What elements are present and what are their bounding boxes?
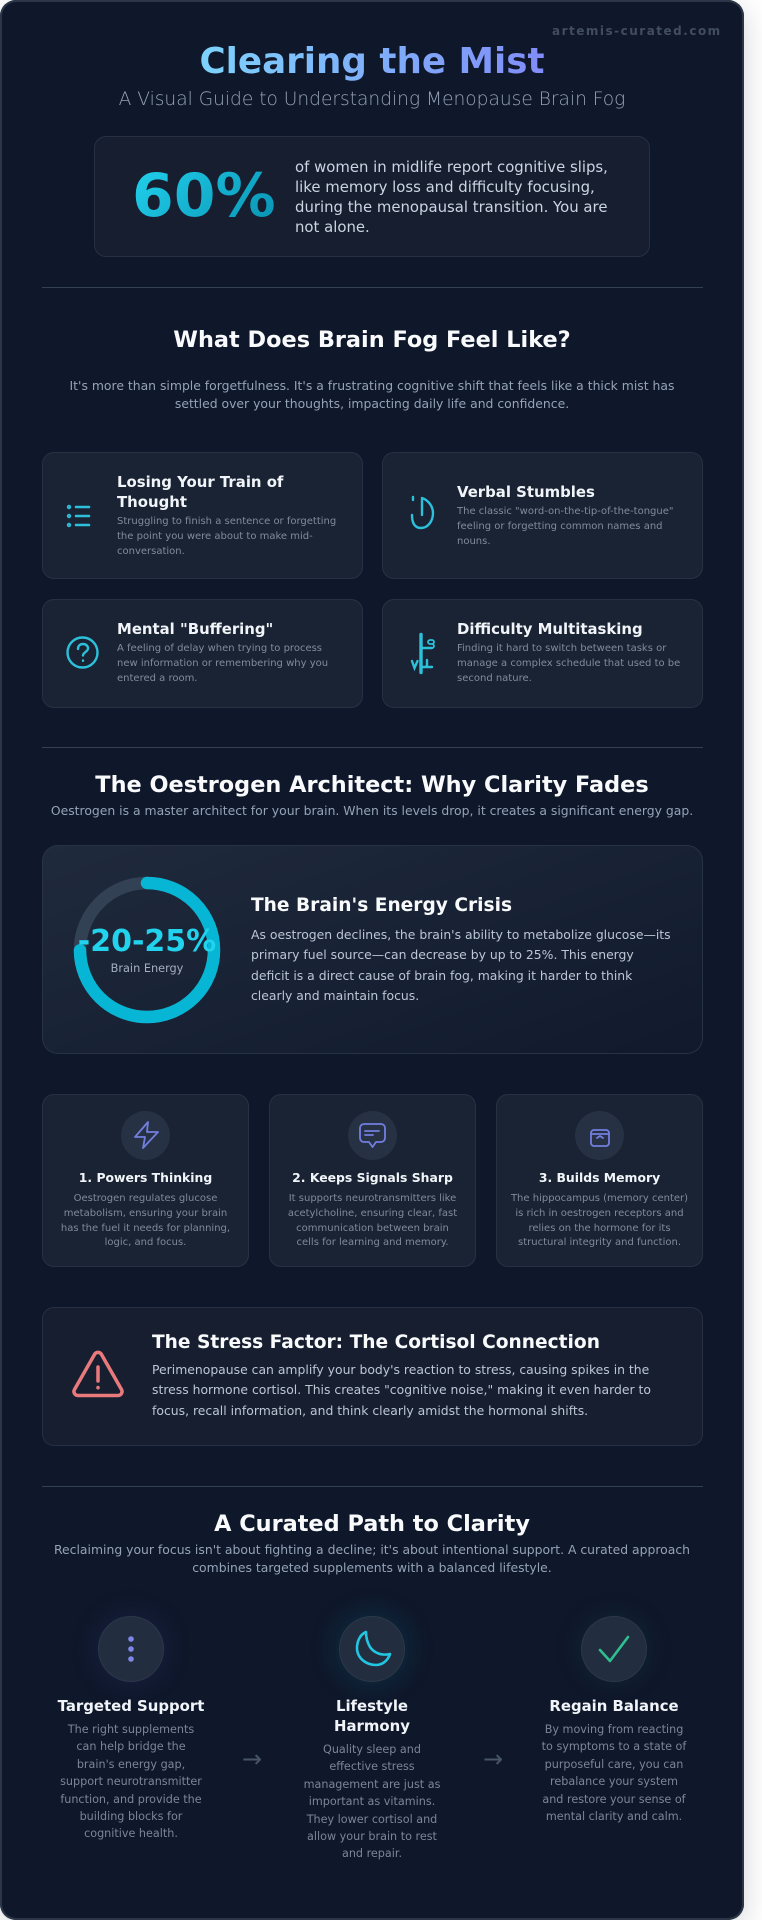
card text: new information or remembering why you [117, 658, 328, 669]
statistic description: during the menopausal transition. You are [295, 198, 607, 216]
icon: check mark [581, 1616, 647, 1682]
panel: difficulty multitasking [382, 599, 703, 708]
icon: chat bubble [348, 1111, 397, 1160]
card text: A feeling of delay when trying to process [117, 643, 322, 654]
icon: list [66, 504, 90, 528]
card text: second nature. [457, 673, 532, 684]
panel text: focus, recall information, and think clearly amidst the hormonal shifts. [152, 1403, 588, 1418]
card text [457, 506, 674, 547]
card title: 3. Builds Memory [539, 1170, 660, 1185]
card text: Struggling to finish a sentence or forgetting [117, 516, 336, 527]
card title: Mental "Buffering" [117, 620, 273, 638]
card text: manage a complex schedule that used to be [457, 658, 680, 669]
panel text: As oestrogen declines, the brain's ability to metabolize glucose—its [251, 927, 671, 942]
step text: cognitive health. [84, 1827, 178, 1840]
card text: is rich in oestrogen receptors and [515, 1208, 684, 1219]
statistic description [295, 158, 608, 236]
step title: Lifestyle [336, 1697, 408, 1715]
card text [117, 516, 336, 557]
card title [117, 473, 284, 511]
step text: building blocks for [80, 1810, 182, 1823]
icon: moon [339, 1616, 405, 1682]
step text: management are just as [304, 1778, 440, 1791]
step title: Targeted Support [58, 1697, 204, 1715]
step text: can help bridge the [76, 1740, 186, 1753]
step text: important as vitamins. [309, 1795, 435, 1808]
card text [61, 1193, 230, 1248]
step text: to symptoms to a state of [542, 1740, 686, 1753]
card text: Oestrogen regulates glucose [74, 1193, 217, 1204]
panel text [251, 927, 671, 1003]
card text [288, 1193, 457, 1248]
step: targeted support [58, 1612, 204, 1840]
icon: memory window [575, 1111, 624, 1160]
icon: three dots [98, 1616, 164, 1682]
icon: lightning bolt [121, 1111, 170, 1160]
card text: logic, and focus. [105, 1237, 186, 1248]
card text: feeling or forgetting common names and [457, 521, 663, 532]
card text: nouns. [457, 536, 491, 547]
intro paragraph: settled over your thoughts, impacting daily life and confidence. [175, 396, 569, 411]
panel: stress factor [42, 1307, 703, 1446]
step text [542, 1723, 686, 1823]
card text: structural integrity and function. [518, 1237, 681, 1248]
card text: The classic "word-on-the-tip-of-the-tongue" [457, 506, 674, 517]
statistic description: of women in midlife report cognitive slips, [295, 158, 608, 176]
icon: multitasking [410, 632, 435, 674]
card text: the point you were about to make mid- [117, 531, 313, 542]
panel text: Perimenopause can amplify your body's reaction to stress, causing spikes in the [152, 1362, 649, 1377]
step text: function, and provide the [60, 1793, 202, 1806]
card text: cells for learning and memory. [296, 1237, 449, 1248]
step text [60, 1723, 202, 1840]
ring value: -20-25% [78, 924, 216, 959]
step text [304, 1743, 440, 1860]
step text: support neurotransmitter [60, 1775, 202, 1788]
section paragraph: Reclaiming your focus isn't about fighting a decline; it's about intentional support. A curated approach [54, 1542, 690, 1557]
arrow: → [242, 1745, 262, 1773]
section paragraph [54, 1542, 690, 1575]
step: regain balance [542, 1616, 686, 1823]
heading: what does brain fog feel like: What Does Brain Fog Feel Like? [173, 327, 571, 353]
icon: question mark circle [66, 636, 99, 669]
step text: rebalance your system [550, 1775, 678, 1788]
step title: Harmony [334, 1717, 410, 1735]
step text: brain's energy gap, [77, 1758, 185, 1771]
panel text: clearly and maintain focus. [251, 988, 419, 1003]
step text: The right supplements [68, 1723, 194, 1736]
card text: metabolism, ensuring your brain [64, 1208, 227, 1219]
intro paragraph [70, 378, 674, 411]
card text: acetylcholine, ensuring clear, fast [288, 1208, 457, 1219]
icon: verbal stumble [410, 496, 434, 530]
panel text: stress hormone cortisol. This creates "cognitive noise," making it even harder to [152, 1382, 651, 1397]
card title: Verbal Stumbles [457, 483, 595, 501]
chart: brain energy ring [74, 876, 220, 1024]
panel: brain energy crisis [42, 845, 703, 1054]
website watermark: artemis-curated.com [552, 24, 722, 38]
card title: Losing Your Train of [117, 473, 283, 491]
card text: Finding it hard to switch between tasks or [457, 643, 666, 654]
heading: oestrogen architect: The Oestrogen Architect: Why Clarity Fades [95, 772, 649, 798]
card title: Thought [117, 493, 187, 511]
card text: entered a room. [117, 673, 198, 684]
card text: communication between brain [296, 1223, 449, 1234]
step title [334, 1697, 410, 1735]
card text: It supports neurotransmitters like [289, 1193, 456, 1204]
step text: By moving from reacting [545, 1723, 683, 1736]
section subtitle: Oestrogen is a master architect for your brain. When its levels drop, it creates a significant energy gap. [51, 803, 693, 818]
card title: Difficulty Multitasking [457, 620, 643, 638]
intro paragraph: It's more than simple forgetfulness. It's a frustrating cognitive shift that feels like a thick mist has [70, 378, 674, 393]
card text: has the fuel it needs for planning, [61, 1223, 230, 1234]
card title: 1. Powers Thinking [79, 1170, 212, 1185]
heading: curated path to clarity: A Curated Path to Clarity [214, 1511, 530, 1537]
step text: They lower cortisol and [307, 1813, 437, 1826]
subtitle: A Visual Guide to Understanding Menopause Brain Fog [119, 89, 625, 110]
panel text [152, 1362, 651, 1418]
panel title: The Stress Factor: The Cortisol Connection [152, 1332, 600, 1353]
section paragraph: combines targeted supplements with a balanced lifestyle. [192, 1560, 552, 1575]
statistic description: like memory loss and difficulty focusing, [295, 178, 595, 196]
step text: and repair. [342, 1847, 402, 1860]
title: Clearing the Mist [199, 41, 545, 82]
card text: relies on the hormone for its [528, 1223, 671, 1234]
step text: purposeful care, you can [545, 1758, 683, 1771]
panel: powers thinking [42, 1094, 249, 1267]
panel text: primary fuel source—can decrease by up to 25%. This energy [251, 947, 634, 962]
panel text: deficit is a direct cause of brain fog, making it harder to think [251, 968, 632, 983]
step text: mental clarity and calm. [546, 1810, 682, 1823]
statistic description: not alone. [295, 218, 370, 236]
card text: conversation. [117, 546, 185, 557]
card text [511, 1193, 688, 1248]
step: lifestyle harmony [304, 1612, 440, 1860]
card text: The hippocampus (memory center) [511, 1193, 688, 1204]
panel: losing your train of thought [42, 452, 363, 579]
panel: keeps signals sharp [269, 1094, 476, 1267]
arrow: → [483, 1745, 503, 1773]
card title: 2. Keeps Signals Sharp [292, 1170, 453, 1185]
step text: Quality sleep and [323, 1743, 421, 1756]
big statistic: 60% [132, 161, 276, 231]
panel title: The Brain's Energy Crisis [251, 895, 512, 916]
panel: 60 percent statistic [94, 136, 650, 257]
step text: and restore your sense of [542, 1793, 686, 1806]
icon: warning triangle [72, 1350, 124, 1398]
step text: effective stress [329, 1760, 415, 1773]
card text [457, 643, 680, 684]
panel: mental buffering [42, 599, 363, 708]
panel: verbal stumbles [382, 452, 703, 579]
ring label: Brain Energy [111, 962, 183, 975]
step text: allow your brain to rest [307, 1830, 437, 1843]
step title: Regain Balance [549, 1697, 679, 1715]
card text [117, 643, 328, 684]
panel: builds memory [496, 1094, 703, 1267]
